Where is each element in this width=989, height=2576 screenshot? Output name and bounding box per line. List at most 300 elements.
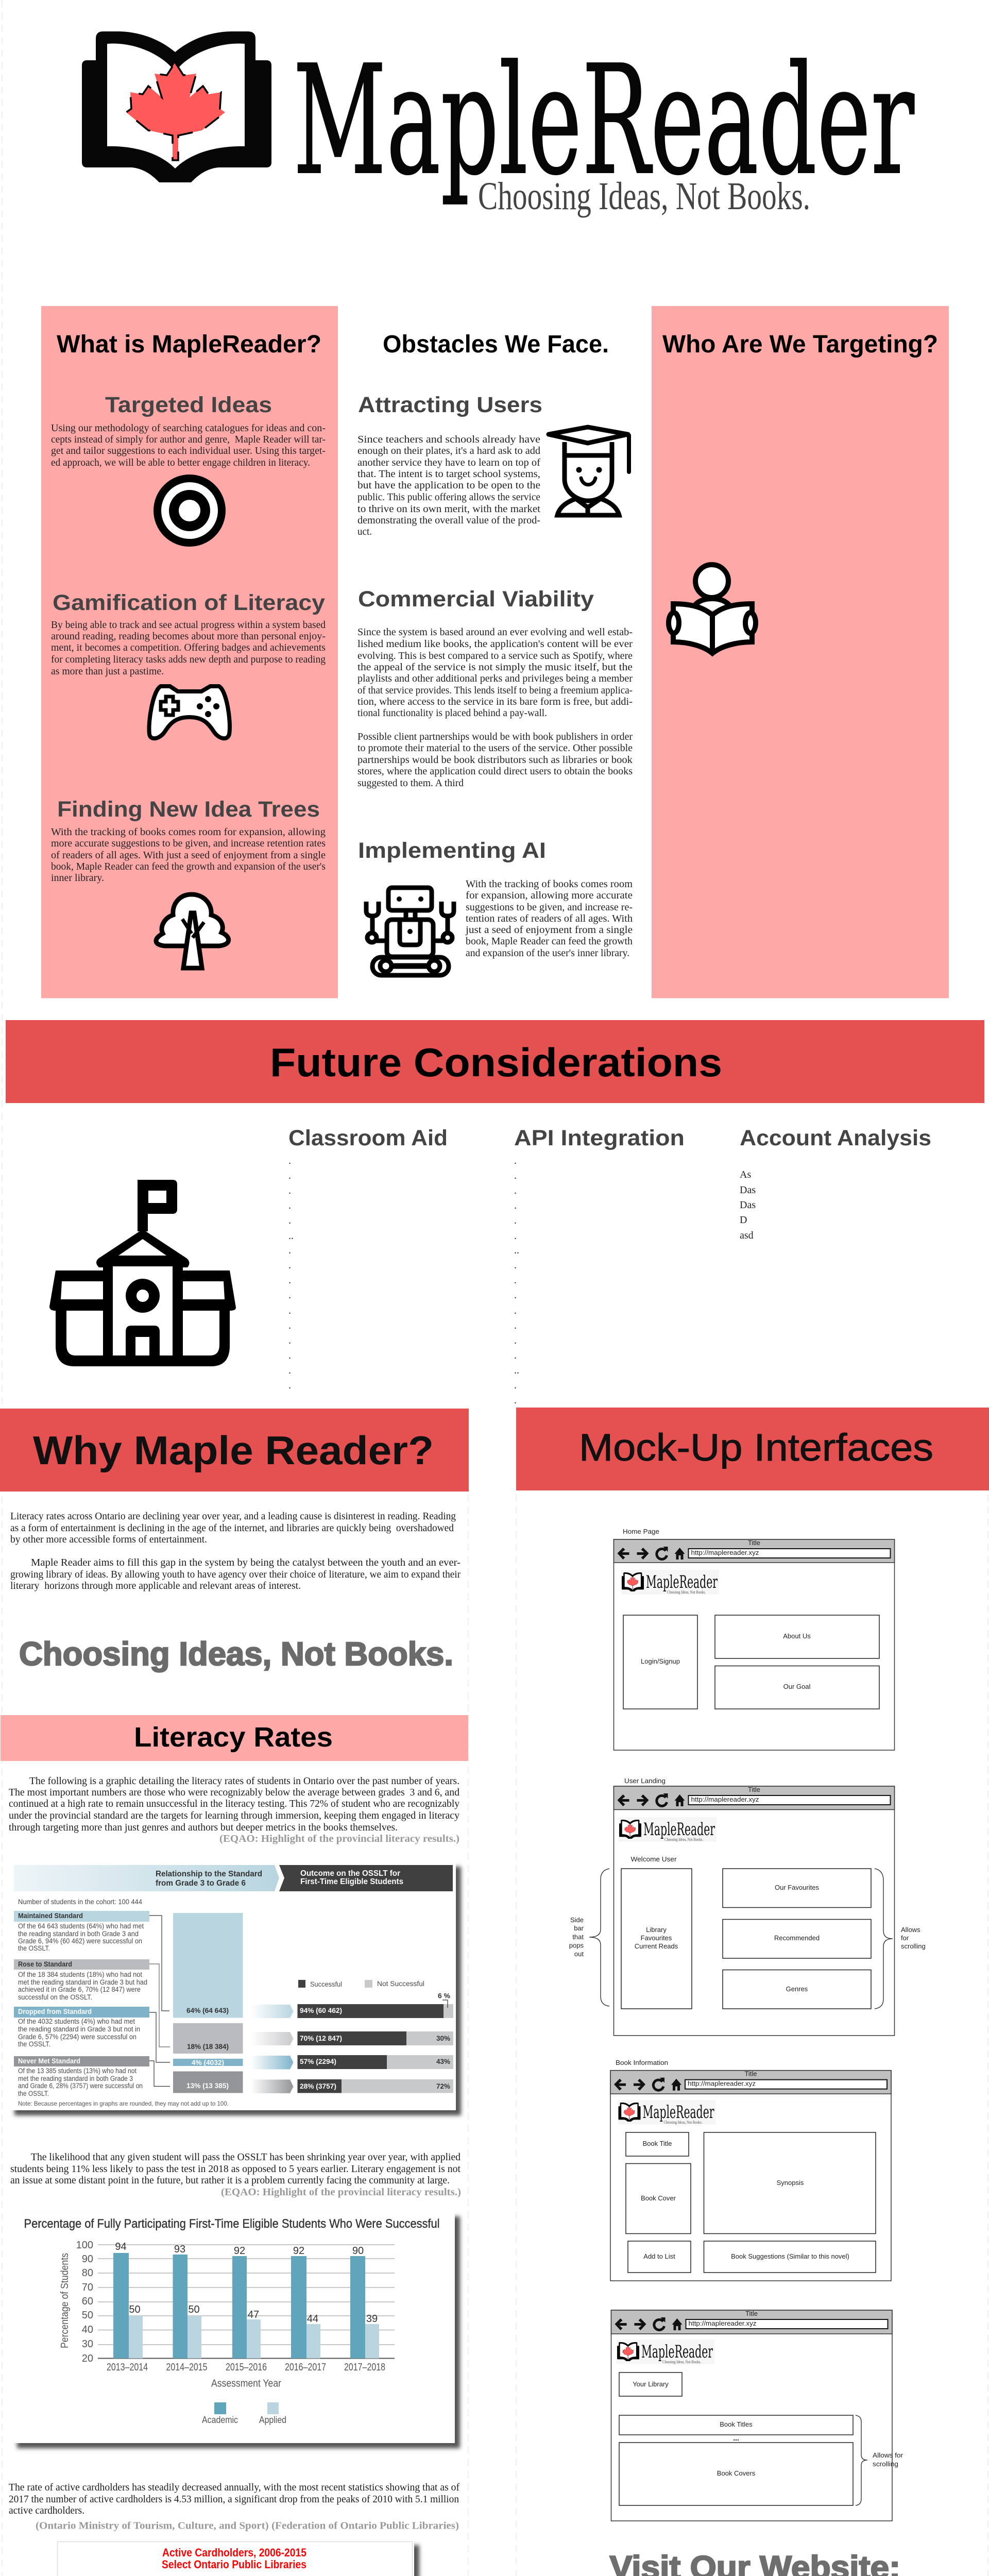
browser window: Title xyxy=(744,2070,757,2078)
text: implementing AI: book, Maple Reader can feed the growth xyxy=(466,936,633,947)
header: outcome on the OSSLT xyxy=(279,1865,453,1891)
box: about us: About Us xyxy=(783,1632,811,1640)
annotation: side bar: pops xyxy=(569,1941,584,1950)
icon: graduate xyxy=(549,427,629,515)
x axis labels xyxy=(107,2362,385,2389)
annotation: allows for scrolling: for xyxy=(901,1934,909,1942)
text: commercial viability: suggested to them. A third xyxy=(357,777,464,789)
annotation: allows for scrolling xyxy=(856,2415,903,2505)
box: book title: Book Title xyxy=(642,2140,672,2147)
category: never met standard: Never Met Standard xyxy=(18,2057,80,2065)
chart title: Percentage of Fully Participating First-Time Eligible Students Who Were Successful xyxy=(24,2217,440,2231)
legend: Academic xyxy=(202,2415,238,2425)
text: gamification: By being able to track and see actual progress within a system based xyxy=(51,619,326,631)
text: OSSLT paragraph: (EQAO: Highlight of the provincial literacy results.) xyxy=(221,2187,461,2198)
box: your library: Your Library xyxy=(633,2380,669,2388)
text: attracting users: that. The intent is to target school systems, xyxy=(357,468,540,480)
tagline: Choosing Ideas, Not Books. xyxy=(478,175,810,218)
banner: future considerations xyxy=(6,1020,984,1103)
column: API integration xyxy=(514,1126,685,1406)
text: commercial viability: lished medium like books, the application's content will be ever xyxy=(357,638,633,650)
text: dots: . xyxy=(288,1305,291,1316)
box: about us xyxy=(715,1615,879,1658)
text: dots: . xyxy=(514,1305,517,1316)
proportion blocks: 18% (18 384) xyxy=(187,2043,229,2050)
bar values: 39 xyxy=(366,2313,378,2325)
text: commercial viability: Since the system is based around an ever evolving and well estab- xyxy=(357,626,633,638)
box: our goal xyxy=(715,1666,879,1709)
text: dots: .. xyxy=(514,1245,519,1256)
text: attracting users: uct. xyxy=(357,526,372,537)
category: maintained standard: Of the 64 643 students (64%) who had met xyxy=(18,1922,144,1930)
panel: what is MapleReader xyxy=(41,306,338,998)
category: rose to standard: successful on the OSSLT. xyxy=(18,1993,92,2001)
text: dots: . xyxy=(288,1290,291,1301)
text: OSSLT paragraph: The likelihood that any given student will pass the OSSLT has been shrinking year over year, with applied xyxy=(31,2151,461,2163)
header logo xyxy=(82,31,915,218)
text: cohort size: Number of students in the cohort: 100 444 xyxy=(18,1898,142,1906)
text: dots xyxy=(514,1155,519,1406)
text: attracting users: enough on their plates, it's a hard ask to add xyxy=(357,445,540,456)
text: OSSLT paragraph: students being 11% less likely to pass the test in 2018 as opposed to 5 years earlier. Literary engagement is not xyxy=(10,2163,461,2175)
mini logo: Choosing Ideas, Not Books. xyxy=(667,1590,706,1595)
browser window: Title xyxy=(748,1786,760,1793)
y axis title: Percentage of Students xyxy=(59,2253,71,2348)
box: book covers xyxy=(619,2443,853,2505)
caption: User Landing xyxy=(624,1777,666,1785)
text: dots: . xyxy=(288,1245,291,1256)
text: dots: . xyxy=(514,1320,517,1331)
box: add to list xyxy=(628,2241,691,2273)
outcome stacked bars: 6 % xyxy=(438,1992,450,2000)
annotation: allows for scrolling xyxy=(875,1869,926,2009)
browser window: Title xyxy=(748,1539,760,1547)
text: commercial viability: tional functionality is placed behind a pay-wall. xyxy=(357,707,547,719)
grid lines and y axis: 60 xyxy=(82,2296,93,2307)
banner: future considerations: Future Considerations xyxy=(270,1040,722,1085)
arrows xyxy=(251,2005,294,2093)
browser window xyxy=(614,1539,894,1750)
box: add to list: Add to List xyxy=(643,2252,675,2260)
mini logo: MapleReader xyxy=(643,1819,715,1840)
text: intro paragraphs xyxy=(10,1511,461,1591)
box: library sidebar xyxy=(621,1869,692,2009)
x axis labels: 2015–2016 xyxy=(226,2362,267,2373)
text: idea trees: inner library. xyxy=(51,872,104,884)
text: targeted ideas: ed approach, we will be able to better engage children in literacy. xyxy=(51,457,310,468)
browser window xyxy=(611,2310,892,2521)
category: maintained standard: the reading standard in both Grade 3 and xyxy=(18,1930,139,1938)
text: account lines: Das xyxy=(740,1184,756,1196)
text: gamification: as more than just a pastime. xyxy=(51,666,164,677)
category: rose to standard: Of the 18 384 students (18%) who had not xyxy=(18,1971,142,1978)
category: maintained standard: Grade 6, 94% (60 462) were successful on xyxy=(18,1937,142,1945)
text: dots: . xyxy=(514,1335,517,1346)
box: our favourites xyxy=(723,1869,871,1907)
subheading: gamification of literacy: Gamification of Literacy xyxy=(53,590,325,615)
text: dots: . xyxy=(288,1155,291,1166)
text: commercial viability: partnerships would be book distributors such as libraries or book xyxy=(357,754,633,766)
text: cardholders paragraph: The rate of active cardholders has steadily decreased annually, with the most recent statistics showing that as of xyxy=(9,2482,459,2493)
mini logo xyxy=(618,2100,716,2125)
text: idea trees: With the tracking of books comes room for expansion, allowing xyxy=(51,826,326,838)
box: genres: Genres xyxy=(786,1985,808,1993)
outcome stacked bars: 94% (60 462) xyxy=(300,2007,342,2014)
annotation: side bar: that xyxy=(572,1933,584,1941)
browser window xyxy=(614,1786,894,2036)
banner: mock-up interfaces xyxy=(516,1408,989,1490)
grid lines and y axis: 70 xyxy=(82,2282,93,2293)
annotation: allows for scrolling: scrolling xyxy=(873,2460,898,2468)
caption: Home Page xyxy=(623,1528,659,1535)
text: cardholders paragraph: active cardholders. xyxy=(9,2505,84,2516)
subheading: targeted ideas: Targeted Ideas xyxy=(105,393,272,417)
annotation: side bar: bar xyxy=(574,1924,584,1932)
outcome stacked bars: 43% xyxy=(436,2058,450,2065)
header: relationship to the standard: from Grade 3 to Grade 6 xyxy=(156,1879,246,1888)
panel: who are we targeting xyxy=(652,306,949,998)
column: API integration: API Integration xyxy=(514,1126,685,1150)
text: dots: . xyxy=(514,1230,517,1242)
outcome stacked bars xyxy=(298,1992,453,2093)
text: commercial viability: stores, where the application could direct users to obtain the books xyxy=(357,766,633,777)
text: targeted ideas xyxy=(51,422,326,468)
icon: book with maple leaf xyxy=(82,31,271,182)
outcome stacked bars: 28% (3757) xyxy=(300,2082,336,2090)
category: dropped from standard: the OSSLT. xyxy=(18,2040,50,2048)
box: library sidebar: Favourites xyxy=(641,1934,672,1942)
box: genres xyxy=(723,1970,871,2009)
text: idea trees xyxy=(51,826,326,884)
text: attracting users xyxy=(357,434,540,537)
mini logo: Choosing Ideas, Not Books. xyxy=(662,2360,701,2364)
text: gamification: ment, it becomes a competition. Offering badges and achievements xyxy=(51,642,326,653)
grid lines and y axis: 90 xyxy=(82,2253,93,2265)
category: rose to standard: achieved it in Grade 6, 70% (12 847) were xyxy=(18,1986,141,1993)
column: account analysis: Account Analysis xyxy=(740,1126,931,1150)
text: commercial viability: Possible client partnerships would be with book publishers in order xyxy=(357,731,633,742)
legend xyxy=(202,2402,286,2425)
x axis labels: 2017–2018 xyxy=(344,2362,385,2373)
proportion blocks: 64% (64 643) xyxy=(186,2007,229,2014)
box: book cover xyxy=(626,2164,691,2234)
line chart card: active cardholders xyxy=(56,2540,419,2576)
text: dots: . xyxy=(514,1350,517,1361)
mini logo: MapleReader xyxy=(641,2342,713,2362)
legend: Not Successful xyxy=(377,1980,424,1988)
text: dots: . xyxy=(514,1260,517,1271)
category: dropped from standard: Dropped from Standard xyxy=(18,2008,92,2015)
text: dots: . xyxy=(288,1170,291,1181)
subheading: implementing AI: Implementing AI xyxy=(358,838,546,863)
text: dots: . xyxy=(514,1185,517,1196)
text: commercial viability: to promote their material to the users of the service. Other possible xyxy=(357,742,633,754)
bar values: 50 xyxy=(129,2304,141,2315)
text: dots: . xyxy=(514,1155,517,1166)
category: never met standard xyxy=(14,2056,149,2097)
wireframe: your library xyxy=(611,2310,903,2521)
text: targeted ideas: Using our methodology of searching catalogues for ideas and con- xyxy=(51,422,326,434)
text: dots: .. xyxy=(288,1230,294,1242)
heading: who are we targeting: Who Are We Targeting? xyxy=(662,331,938,358)
proportion blocks: 13% (13 385) xyxy=(186,2082,229,2090)
bar values: 47 xyxy=(248,2309,259,2320)
text: literacy rates paragraph: under the provincial standard are the targets for learning through immersion, keeping them engaged in literacy xyxy=(9,1810,459,1821)
text: intro paragraphs: growing library of ideas. By allowing youth to have agency over their choice of literature, we aim to expand their xyxy=(10,1569,461,1580)
browser window: http://maplereader.xyz xyxy=(688,2080,756,2088)
category: rose to standard: met the reading standard in Grade 3 but had xyxy=(18,1978,147,1986)
text: intro paragraphs: Literacy rates across Ontario are declining year over year, and a leading cause is disinterest in reading. Reading xyxy=(10,1511,456,1522)
outcome stacked bars: 70% (12 847) xyxy=(300,2035,342,2042)
chart title: Select Ontario Public Libraries xyxy=(162,2558,306,2571)
box: synopsis xyxy=(704,2132,876,2234)
outcome stacked bars: 30% xyxy=(436,2035,450,2042)
chart title: Active Cardholders, 2006-2015 xyxy=(162,2546,306,2559)
x axis labels: 2013–2014 xyxy=(107,2362,148,2373)
grid lines and y axis: 30 xyxy=(82,2338,93,2350)
box: login xyxy=(623,1615,697,1709)
text: dots: . xyxy=(514,1275,517,1286)
text: literacy rates paragraph: The most important numbers are those who were recognizably below the average between grades 3 and 6, and xyxy=(9,1787,459,1798)
text: dots: . xyxy=(288,1335,291,1346)
header: outcome on the OSSLT: Outcome on the OSSLT for xyxy=(300,1869,400,1878)
bar values: 93 xyxy=(174,2244,185,2255)
text: commercial viability xyxy=(357,626,633,789)
text: attracting users: but have the application to be open to the xyxy=(357,480,540,491)
box: recommended xyxy=(723,1920,871,1958)
text: dots: . xyxy=(288,1350,291,1361)
text: gamification: around reading, reading becomes about more than personal enjoy- xyxy=(51,631,326,642)
box: book covers: Book Covers xyxy=(717,2469,756,2477)
box: your library xyxy=(619,2372,682,2396)
category: rose to standard xyxy=(14,1959,149,2001)
text: commercial viability: of that service provides. This lends itself to being a freemium applica- xyxy=(357,685,633,696)
category: dropped from standard: the reading standard in Grade 3 but not in xyxy=(18,2025,140,2033)
text: dots: . xyxy=(288,1320,291,1331)
text: targeted ideas: get and tailor suggestions to each individual user. Using this target- xyxy=(51,445,326,456)
text: attracting users: another service they have to learn on top of xyxy=(357,457,540,468)
text: dots: . xyxy=(514,1170,517,1181)
legend: Successful xyxy=(310,1980,342,1988)
browser window xyxy=(610,2070,891,2281)
text: dots: . xyxy=(288,1275,291,1286)
x axis labels: Assessment Year xyxy=(211,2378,281,2389)
wireframe: book information xyxy=(610,2059,891,2281)
text: literacy rates paragraph: The following is a graphic detailing the literacy rates of students in Ontario over the past number of years. xyxy=(29,1775,459,1787)
text: literacy rates paragraph: (EQAO: Highlight of the provincial literacy results.) xyxy=(219,1833,459,1844)
proportion blocks xyxy=(173,1913,243,2093)
text: dots: . xyxy=(514,1215,517,1226)
mini logo: Choosing Ideas, Not Books. xyxy=(663,2120,703,2125)
header: relationship to the standard: Relationship to the Standard xyxy=(156,1870,262,1878)
annotation: allows for scrolling: Allows xyxy=(901,1926,920,1934)
wireframe: user landing xyxy=(569,1777,926,2036)
text: intro paragraphs: as a form of entertainment is declining in the age of the internet, and libraries are quickly being overshadowed xyxy=(10,1522,454,1534)
text: dots: . xyxy=(514,1290,517,1301)
text: attracting users: Since teachers and schools already have xyxy=(357,434,540,445)
panel: obstacles we face xyxy=(357,331,633,975)
subheading: attracting users: Attracting Users xyxy=(358,393,542,417)
box: book suggestions xyxy=(704,2241,876,2273)
column: classroom aid: Classroom Aid xyxy=(288,1126,448,1150)
icon: school xyxy=(49,1180,236,1366)
box: our goal: Our Goal xyxy=(783,1683,810,1690)
browser window: http://maplereader.xyz xyxy=(688,2319,756,2327)
box: recommended: Recommended xyxy=(774,1934,820,1942)
category: maintained standard: the OSSLT. xyxy=(18,1944,50,1952)
text: commercial viability: the appeal of the service is not simply the music itself, but the xyxy=(357,662,633,673)
text: implementing AI: and expansion of the user's inner library. xyxy=(466,947,629,959)
text: dots: . xyxy=(288,1200,291,1211)
text: attracting users: public. This public offering allows the service xyxy=(357,492,540,503)
mini logo: MapleReader xyxy=(646,1572,718,1592)
bar values: 92 xyxy=(293,2245,304,2257)
mini logo xyxy=(619,1817,717,1842)
text: OSSLT paragraph: an issue at some distant point in the future, but rather it is a problem currently facing the community at large. xyxy=(10,2175,450,2186)
text: attracting users: demonstrating the overall value of the prod- xyxy=(357,515,540,526)
x axis labels: 2014–2015 xyxy=(166,2362,207,2373)
category: dropped from standard xyxy=(14,2007,149,2048)
text: account lines: asd xyxy=(740,1230,754,1241)
text: idea trees: more accurate suggestions to be given, and increase retention rates xyxy=(51,838,326,849)
text: implementing AI xyxy=(465,878,633,959)
bars xyxy=(113,2253,379,2359)
text: dots: . xyxy=(514,1395,517,1406)
box: synopsis: Synopsis xyxy=(777,2179,804,2187)
caption: Book Information xyxy=(616,2059,668,2066)
box: book suggestions: Book Suggestions (Similar to this novel) xyxy=(731,2252,849,2260)
text: commercial viability: playlists and other additional perks and privileges being a member xyxy=(357,673,633,684)
text: intro paragraphs: by other more accessible forms of entertainment. xyxy=(10,1534,207,1545)
legend xyxy=(298,1980,424,1988)
text: idea trees: book, Maple Reader can feed the growth and expansion of the user's xyxy=(51,861,326,872)
category: never met standard: Of the 13 385 students (13%) who had not xyxy=(18,2067,137,2075)
browser window: Title xyxy=(745,2310,758,2317)
grid lines and y axis: 100 xyxy=(76,2240,93,2251)
text: cardholders paragraph: 2017 the number of active cardholders is 4.53 million, a significant drop from the peaks of 2010 with 5.1 million xyxy=(9,2494,459,2505)
section: future considerations xyxy=(6,1020,984,1406)
chart card: relationship to the standard xyxy=(9,1861,461,2115)
box: library sidebar: Current Reads xyxy=(635,1942,678,1950)
subheading: finding new idea trees: Finding New Idea Trees xyxy=(57,797,320,822)
proportion blocks: 4% (4032) xyxy=(192,2059,224,2066)
column: account analysis xyxy=(740,1126,931,1241)
text: dots: . xyxy=(288,1260,291,1271)
slogan: choosing ideas, not books: Choosing Ideas, Not Books. xyxy=(19,1635,453,1672)
annotation: side bar: out xyxy=(574,1950,584,1958)
text: dots: . xyxy=(288,1380,291,1391)
x axis labels: 2016–2017 xyxy=(285,2362,326,2373)
icon: person reading xyxy=(669,565,756,653)
bar values: 94 xyxy=(115,2241,127,2252)
category: rose to standard: Rose to Standard xyxy=(18,1960,72,1968)
text: intro paragraphs: literary horizons through more applicable and relevant areas of interest. xyxy=(10,1580,301,1591)
text: gamification: for completing literacy tasks adds new depth and purpose to reading xyxy=(51,654,326,665)
outcome stacked bars: 72% xyxy=(436,2082,450,2090)
text: account lines: As xyxy=(740,1169,751,1180)
text: dots: . xyxy=(288,1215,291,1226)
text: implementing AI: for expansion, allowing more accurate xyxy=(466,890,633,901)
category: never met standard: the OSSLT. xyxy=(18,2090,49,2097)
legend: Applied xyxy=(259,2415,286,2425)
banner: mock-up interfaces: Mock-Up Interfaces xyxy=(579,1426,933,1469)
text: account lines: Das xyxy=(740,1199,756,1211)
text: dots: . xyxy=(288,1365,291,1376)
banner: why maple reader xyxy=(0,1409,469,1492)
note: Note: Because percentages in graphs are rounded, they may not add up to 100. xyxy=(18,2100,229,2107)
header: relationship to the standard xyxy=(14,1865,279,1891)
box: book title xyxy=(626,2132,689,2156)
category: maintained standard xyxy=(14,1911,149,1952)
text: intro paragraphs: Maple Reader aims to fill this gap in the system by being the catalyst between the youth and an ever- xyxy=(31,1557,461,1568)
text: OSSLT paragraph xyxy=(10,2151,461,2198)
greeting: Welcome User xyxy=(630,1855,677,1863)
text: dots xyxy=(288,1155,294,1391)
mini logo xyxy=(621,1570,719,1595)
heading: what is MapleReader: What is MapleReader? xyxy=(57,331,321,358)
annotation: allows for scrolling: scrolling xyxy=(901,1942,926,1950)
grid lines and y axis: 20 xyxy=(82,2353,93,2364)
text: dots: . xyxy=(514,1380,517,1391)
text: implementing AI: just a seed of enjoyment from a single xyxy=(465,924,633,936)
text: literacy rates paragraph: continued at a high rate to remain unsuccessful in the literacy testing. This 72% of student who are recognizably xyxy=(9,1798,459,1809)
text: literacy rates paragraph: through targeting more than just genres and authors but deeper metrics in the books themselves. xyxy=(9,1822,398,1833)
text: attracting users: to thrive on its own merit, with the market xyxy=(357,503,540,515)
text: gamification xyxy=(51,619,326,677)
browser window: http://maplereader.xyz xyxy=(691,1795,759,1803)
mini logo: MapleReader xyxy=(643,2102,714,2123)
bar values: 50 xyxy=(188,2304,200,2315)
text: targeted ideas: cepts instead of simply for author and genre, Maple Reader will tar- xyxy=(51,434,326,445)
category: maintained standard: Maintained Standard xyxy=(18,1912,83,1920)
annotation: allows for scrolling: Allows for xyxy=(873,2451,903,2459)
text: dots: .. xyxy=(514,1365,519,1376)
category: never met standard: met the reading standard in both Grade 3 xyxy=(18,2075,133,2082)
ellipsis: ... xyxy=(733,2434,739,2442)
box: our favourites: Our Favourites xyxy=(775,1884,819,1891)
text: dots: . xyxy=(288,1185,291,1196)
outcome stacked bars: 57% (2294) xyxy=(300,2058,336,2065)
mini logo xyxy=(617,2340,714,2364)
box: library sidebar: Library xyxy=(646,1926,667,1934)
icon: tree xyxy=(156,894,229,968)
banner: literacy rates xyxy=(1,1715,468,1761)
text: implementing AI: suggestions to be given, and increase re- xyxy=(466,902,633,913)
icon: robot xyxy=(366,888,454,975)
text: cardholders paragraph: (Ontario Ministry of Tourism, Culture, and Sport) (Federation of Ontario Public Libraries) xyxy=(36,2520,459,2532)
bar values: 90 xyxy=(352,2245,364,2257)
icon: target xyxy=(158,478,221,543)
bar values: 44 xyxy=(307,2313,318,2325)
text: literacy rates paragraph xyxy=(9,1775,459,1844)
banner: literacy rates: Literacy Rates xyxy=(134,1722,333,1753)
icon: game controller xyxy=(149,686,230,738)
mini logo: Choosing Ideas, Not Books. xyxy=(664,1837,703,1842)
bar chart card: percentage successful xyxy=(12,2210,460,2448)
annotation: side bar: Side xyxy=(570,1916,584,1924)
bar values: 92 xyxy=(234,2245,245,2257)
category: never met standard: and Grade 6, 28% (3757) were successful on xyxy=(18,2082,143,2090)
category: dropped from standard: Grade 6, 57% (2294) were successful on xyxy=(18,2033,137,2041)
grid lines and y axis xyxy=(76,2240,395,2364)
box: book titles xyxy=(619,2415,853,2435)
heading: obstacles: Obstacles We Face. xyxy=(383,331,609,358)
annotation: side bar xyxy=(569,1869,609,2006)
text: dots: . xyxy=(514,1200,517,1211)
chart title xyxy=(162,2546,306,2571)
category: dropped from standard: Of the 4032 students (4%) who had met xyxy=(18,2018,135,2025)
box: book cover: Book Cover xyxy=(641,2194,676,2202)
